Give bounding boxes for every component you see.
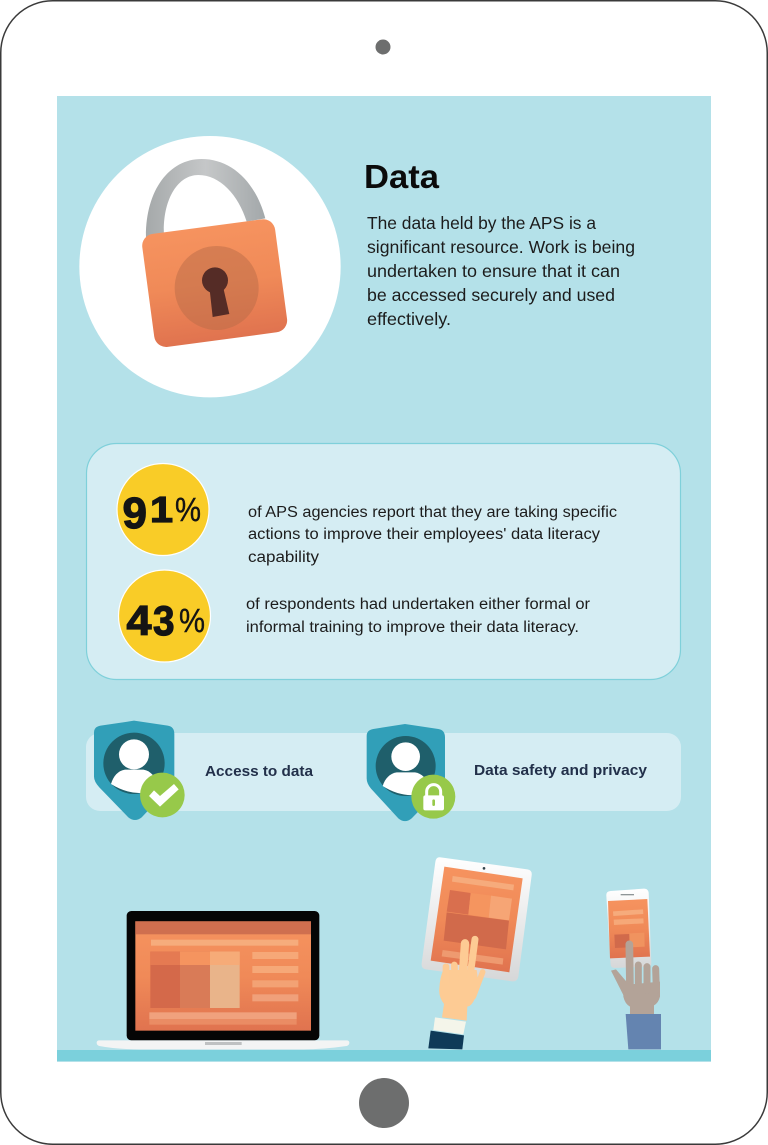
keyhole (202, 267, 229, 317)
label: data safety and privacy: Data safety and privacy (474, 762, 648, 779)
stat badge: 43%: 3 (153, 597, 174, 644)
stat text: 91%: capability (248, 549, 319, 566)
intro paragraph (367, 213, 635, 329)
padlock body (141, 218, 289, 348)
stat badge: 91%: 1 (150, 489, 173, 530)
tablet home button (359, 1078, 409, 1128)
intro paragraph: The data held by the APS is a (367, 213, 596, 233)
stat badge: 43% (118, 570, 210, 662)
tablet camera (376, 40, 390, 54)
tablet device (422, 857, 532, 981)
illustration: phone with hand (606, 889, 661, 1049)
label: access to data: Access to data (205, 763, 314, 780)
panel: statistics (86, 444, 680, 680)
illustration: laptop (97, 911, 349, 1049)
panel: data access and safety (86, 721, 681, 821)
icon: access shield with check (94, 721, 185, 820)
stat text: 91%: of APS agencies report that they are taking specific (248, 504, 617, 521)
stat text: 43%: informal training to improve their data literacy. (246, 619, 579, 636)
stat badge: 91%: % (175, 491, 201, 528)
title: Data (364, 158, 440, 195)
hand (439, 939, 483, 1021)
screen background (57, 96, 711, 1062)
stat badge: 91% (117, 464, 209, 556)
stat badge: 91%: 9 (122, 489, 147, 538)
stat badge: 43%: 4 (126, 597, 152, 644)
stat text: 91%: actions to improve their employees' data literacy (248, 526, 600, 543)
stat badge: 43%: % (179, 602, 205, 639)
stat text: 43% (246, 596, 590, 636)
intro paragraph: be accessed securely and used (367, 285, 615, 305)
phone device (606, 889, 651, 968)
hand (611, 944, 660, 1014)
white circle (79, 136, 341, 397)
intro paragraph: significant resource. Work is being (367, 237, 635, 257)
stat text: 91% (248, 504, 617, 566)
intro paragraph: undertaken to ensure that it can (367, 261, 620, 281)
ground band (57, 1050, 711, 1061)
keyhole plate (175, 246, 259, 330)
icon: safety shield with lock (367, 724, 455, 821)
intro paragraph: effectively. (367, 309, 451, 329)
padlock shackle (146, 159, 265, 240)
stat text: 43%: of respondents had undertaken either formal or (246, 596, 590, 613)
illustration: tablet with hand (422, 857, 532, 1049)
padlock illustration (79, 136, 341, 397)
